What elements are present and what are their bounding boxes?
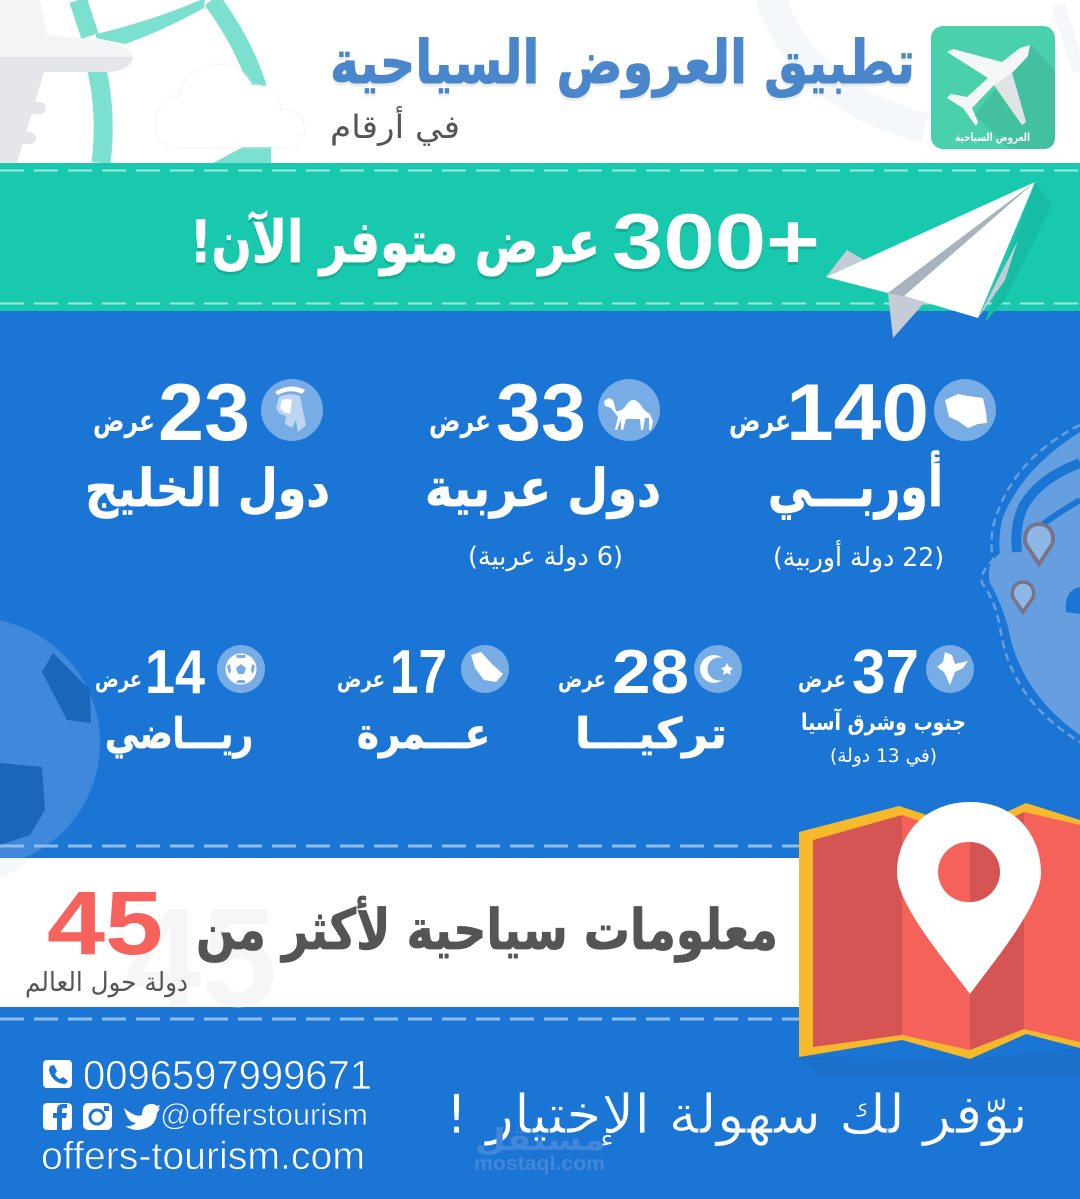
website: offers-tourism.com <box>41 1135 365 1178</box>
region name: ريـــاضي <box>105 709 253 759</box>
subtitle: في أرقام <box>330 106 460 146</box>
football decoration <box>0 618 100 868</box>
number 28: 28 <box>612 638 689 707</box>
icon: crescent and star <box>694 645 742 693</box>
region name: جنوب وشرق آسيا <box>801 707 966 736</box>
label offers: عرض <box>429 404 491 439</box>
card: Turkey <box>558 638 742 759</box>
label offers: عرض <box>798 667 846 693</box>
number 140: 140 <box>786 368 929 458</box>
card: Sports <box>95 638 265 759</box>
panel: green banner <box>0 163 1080 311</box>
globe decoration <box>982 425 1080 742</box>
tagline: نوّفر لك سهولة الإختيار ! <box>445 1083 1028 1146</box>
map with location pin <box>799 802 1080 1077</box>
card: South and East Asia <box>798 638 974 767</box>
panel: blue main background <box>0 311 1080 1199</box>
phone number: 0096597999671 <box>83 1052 372 1098</box>
region name: تركيـــا <box>575 709 727 759</box>
title: تطبيق العروض السياحية <box>330 28 915 98</box>
ghost number watermark: 45 <box>125 879 277 1036</box>
icon: Saudi Arabia map <box>461 645 509 693</box>
countries caption: دولة حول العالم <box>25 968 188 998</box>
icon: football <box>217 645 265 693</box>
number 23: 23 <box>158 368 250 458</box>
country count: (6 دولة عربية) <box>468 542 623 572</box>
card: Gulf countries <box>85 368 330 519</box>
label offers: عرض <box>93 404 155 439</box>
icons: social media <box>43 1103 160 1130</box>
header background decoration <box>0 0 1080 163</box>
watermark: mostaql: mostaql.com <box>474 1153 605 1175</box>
icon: app logo: العروض السياحية <box>955 131 1030 144</box>
number 17: 17 <box>390 638 447 707</box>
country count: (22 دولة أوربية) <box>773 539 944 573</box>
information heading: معلومات سياحية لأكثر من <box>196 895 778 963</box>
watermark: mostaql: مستقل <box>475 1123 605 1158</box>
banner number: 300+ <box>612 197 820 285</box>
icon: app logo <box>931 26 1055 149</box>
country count: (في 13 دولة) <box>830 745 937 767</box>
paper plane <box>826 182 1052 338</box>
number 33: 33 <box>496 368 586 458</box>
region name: دول عربية <box>425 459 661 519</box>
region name: أوربـــي <box>768 450 943 520</box>
card: Europe <box>729 368 996 573</box>
card: Umrah <box>337 638 509 759</box>
icon: India map <box>926 645 974 693</box>
number 14: 14 <box>145 638 205 707</box>
panel: white information band <box>0 846 800 1019</box>
label offers: عرض <box>95 667 142 693</box>
card: Arab countries <box>425 368 661 572</box>
icon: Gulf man portrait <box>261 379 323 441</box>
social handle: @offerstourism <box>160 1097 368 1132</box>
banner heading: عرض متوفر الآن! <box>190 208 600 277</box>
icon: Europe country map <box>934 379 996 441</box>
watermark: mostaql <box>474 1123 605 1175</box>
label offers: عرض <box>337 667 385 693</box>
region name: دول الخليج <box>85 459 330 519</box>
label offers: عرض <box>729 404 791 439</box>
icon: camel <box>598 379 660 441</box>
region name: عـــمرة <box>357 709 490 759</box>
label offers: عرض <box>558 667 606 693</box>
number 37: 37 <box>852 638 919 707</box>
number 45: 45 <box>47 874 163 974</box>
icon: phone <box>43 1060 72 1088</box>
